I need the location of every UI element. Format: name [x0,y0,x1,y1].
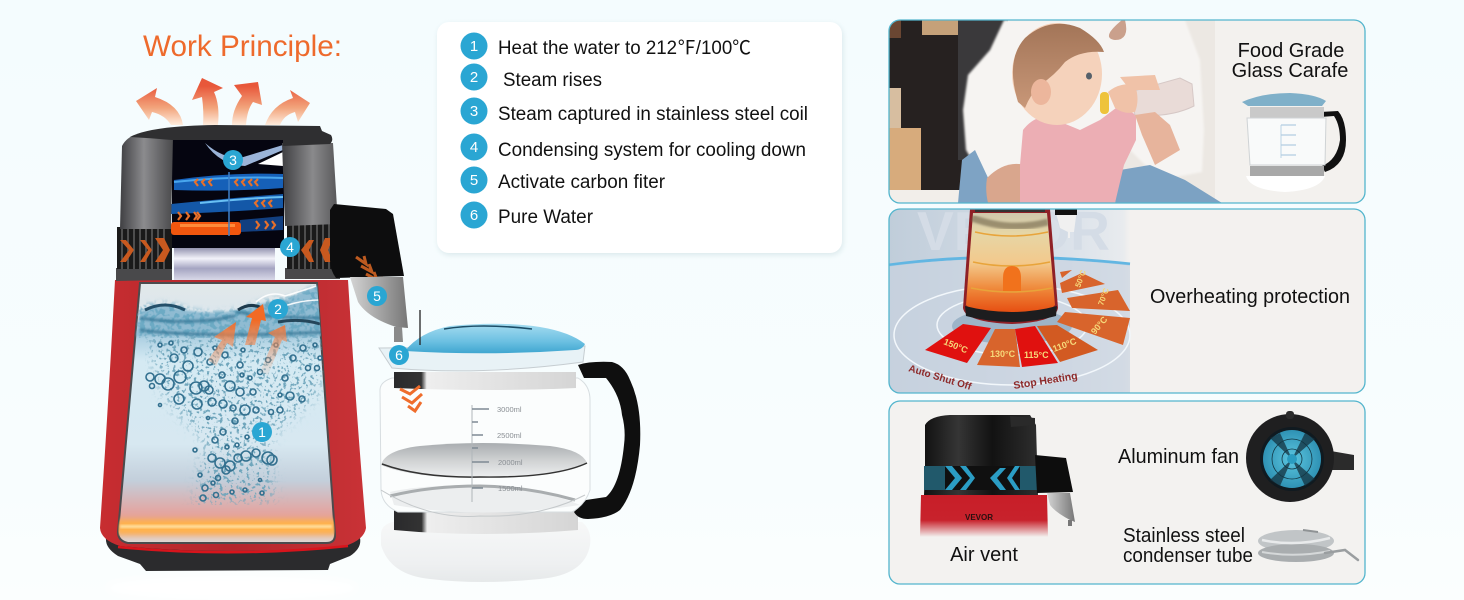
step 6: Pure Water [498,207,594,228]
carafe upper band [394,372,576,390]
illustration: water distiller cutaway [100,125,408,600]
carafe handle [574,362,640,519]
distiller silver condenser plate [174,247,275,280]
disc rings [889,259,1130,393]
dripping chevrons [400,386,422,411]
left grey column [120,133,173,229]
numbered markers on distiller: 4 [286,239,294,255]
orange flow chevrons in coil [178,179,275,229]
right grey column [282,143,338,226]
temperature sectors: 50°C [1073,269,1088,289]
glowing horizon line [889,257,1130,265]
spout housing [330,204,404,278]
icon: aluminum fan [1246,411,1354,502]
panel: food grade glass carafe [889,20,1365,203]
bright red rim [118,546,348,552]
baby hands and adult hand [1108,75,1160,113]
food grade heading: Food Grade [1238,40,1344,62]
step 2: Steam rises [503,70,602,91]
VEVOR watermark: VEVOR [917,200,1110,262]
bottle nipple [1100,92,1109,114]
measurement scale [472,405,523,502]
steps card [437,22,842,253]
numbered markers on distiller: 5 [373,288,381,304]
step 4: 4 [470,139,478,156]
temperature sectors: 110°C [1051,336,1078,354]
step 1 [460,32,751,60]
step 3: Steam captured in stainless steel coil [498,104,808,125]
measurement scale: 2500ml [497,431,522,440]
steam arrows in water [208,304,287,375]
spout tip [394,327,403,342]
panel 3 background [889,401,1365,584]
carafe glass body [380,378,590,512]
step 6: 6 [470,207,478,224]
coil window [171,138,284,248]
stainless steel condenser label: condenser tube [1123,545,1253,567]
baby eye [1086,72,1092,80]
panel 1 border [889,20,1365,203]
VEVOR logo: VEVOR [965,513,993,522]
carafe glass rim [379,346,585,371]
distiller shadow reflection [107,576,357,600]
mini carafe icon [1242,93,1346,192]
aluminum fan label: Aluminum fan [1118,446,1239,468]
panel 2 border [889,209,1365,393]
step 3: 3 [470,103,478,120]
numbered markers on distiller [223,150,409,442]
distiller red body [100,280,366,551]
stop heating label: Stop Heating [1013,370,1078,392]
panel 1 background [889,20,1365,203]
measurement scale: 2000ml [498,458,523,467]
numbered markers on distiller: 1 [258,424,266,440]
step 6 [460,202,594,228]
step 5: Activate carbon fiter [498,172,666,193]
photo: baby drinking from bottle [889,20,1222,203]
thermostat distiller [963,209,1058,324]
food grade heading: Glass Carafe [1232,60,1348,82]
step 2: 2 [470,69,478,86]
panel: air vent, fan and condenser [889,401,1365,584]
baby head [1012,23,1102,125]
step 4: Condensing system for cooling down [498,140,806,161]
temperature sectors: 115°C [1024,350,1049,360]
step 1: Heat the water to 212℉/100℃ [498,38,751,59]
measurement scale: 3000ml [497,405,522,414]
temperature sectors [925,269,1130,367]
baby hair [1013,24,1104,108]
water, foam and bubbles [118,284,335,534]
air vent distiller [920,415,1075,537]
step 1: 1 [470,38,478,55]
numbered markers on distiller: 3 [229,152,237,168]
left vent with orange chevrons [117,227,172,269]
panel: numbered steps list [437,22,842,253]
illustration: glass carafe [379,310,640,582]
water window [118,283,335,543]
foam speckle [136,284,328,338]
temperature sectors: 70°C [1096,287,1111,307]
distiller lid [130,125,332,146]
baby ear [1031,79,1051,105]
step 4 [460,134,806,161]
title: Work Principle: Work Principle: [143,30,342,63]
step 2 [460,64,602,91]
jeans [958,150,988,202]
auto shut off label: Auto Shut Off [907,363,973,393]
spout chevrons [356,256,382,284]
adult hand on baby [986,164,1020,202]
icon: heat arrows rising from distiller [136,78,310,125]
air vent label: Air vent [950,544,1018,566]
right vent with orange chevrons [287,224,335,269]
panel 2 background [889,209,1365,393]
distiller collar band [116,268,340,281]
overheating text: Overheating protection [1150,286,1350,308]
panel: overheating protection [889,200,1365,393]
carafe blue lid [405,324,585,353]
bottle [1130,78,1194,116]
temperature sectors: 90°C [1089,314,1110,336]
carafe white base [381,522,590,582]
carafe water surface [381,443,587,516]
numbered markers on distiller: 2 [274,301,282,317]
carafe lower band [394,508,578,534]
adult shirt [963,20,1204,182]
distiller base [106,538,360,571]
numbered markers on distiller: 6 [395,347,403,363]
carbon filter spout [350,277,408,328]
temperature sectors: 130°C [990,349,1016,359]
temperature sectors: 150°C [942,337,970,355]
food grade heading [1232,40,1348,82]
stainless steel condenser label [1123,525,1253,567]
step 3 [460,98,808,125]
thermostat illustration [889,200,1130,393]
stainless steel condenser label: Stainless steel [1123,525,1245,547]
step 5: 5 [470,172,478,189]
baby sweater [1020,105,1136,203]
step 5 [460,166,666,194]
rising bubble speckle [145,335,325,505]
icon: condenser coil [1258,530,1358,562]
measurement scale: 1500ml [498,484,523,493]
